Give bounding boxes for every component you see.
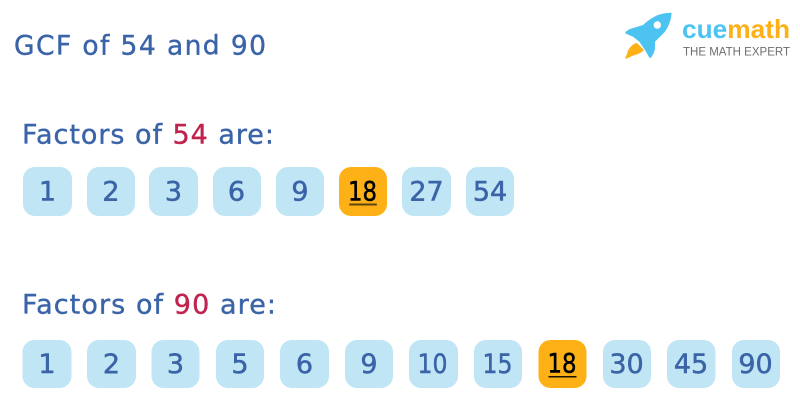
factor 27: 27 bbox=[409, 176, 444, 208]
factor 1: 1 bbox=[38, 349, 56, 380]
factor 9: 9 bbox=[360, 349, 378, 380]
factor 18 highlighted: 18 bbox=[548, 348, 576, 380]
factor 27 bbox=[402, 167, 451, 216]
factor 6 bbox=[213, 167, 261, 216]
factor 10: 10 bbox=[418, 349, 448, 380]
factor 9 bbox=[345, 340, 393, 388]
factor 2 bbox=[87, 167, 135, 216]
factor 5: 5 bbox=[231, 349, 249, 380]
factor 9 bbox=[276, 167, 324, 216]
factor 2 bbox=[87, 340, 136, 388]
factor 3 bbox=[152, 340, 200, 388]
factor 2: 2 bbox=[103, 349, 120, 380]
factor 1 bbox=[22, 340, 72, 388]
factor 3 bbox=[149, 167, 198, 216]
logo wordmark: cuemath bbox=[682, 14, 790, 44]
factor 18 highlighted bbox=[339, 167, 387, 216]
factor 15: 15 bbox=[482, 349, 512, 380]
factor 6: 6 bbox=[296, 349, 313, 380]
factor 6 bbox=[280, 340, 329, 388]
factor 30: 30 bbox=[609, 349, 644, 380]
factor 10 bbox=[409, 340, 458, 388]
factor 1 bbox=[23, 167, 72, 216]
factor 90: 90 bbox=[738, 349, 773, 380]
factor 5 bbox=[216, 340, 264, 388]
factor 1: 1 bbox=[39, 176, 56, 208]
heading: factors of 90: Factors of 90 are: bbox=[22, 289, 276, 320]
row: factors of 90 bbox=[22, 340, 780, 388]
icon: rocket bbox=[625, 13, 672, 59]
factor 18 highlighted: 18 bbox=[348, 176, 377, 208]
factor 90 bbox=[732, 340, 780, 388]
factor 6: 6 bbox=[228, 176, 245, 208]
factor 3: 3 bbox=[167, 349, 184, 380]
factor 45 bbox=[667, 340, 716, 388]
factor 9: 9 bbox=[291, 176, 309, 208]
factor 30 bbox=[603, 340, 651, 388]
factor 54: 54 bbox=[473, 176, 507, 208]
factor 54 bbox=[466, 167, 514, 216]
factor 15 bbox=[474, 340, 522, 388]
heading: factors of 54: Factors of 54 are: bbox=[22, 119, 274, 150]
row: factors of 54 bbox=[23, 167, 514, 216]
title: GCF of 54 and 90 bbox=[14, 30, 266, 61]
logo tagline: THE MATH EXPERT bbox=[683, 47, 790, 59]
factor 18 highlighted bbox=[538, 340, 586, 388]
factor 3: 3 bbox=[165, 176, 182, 208]
logo: cuemath bbox=[625, 13, 790, 59]
factor 45: 45 bbox=[674, 349, 708, 380]
factor 2: 2 bbox=[102, 176, 120, 208]
